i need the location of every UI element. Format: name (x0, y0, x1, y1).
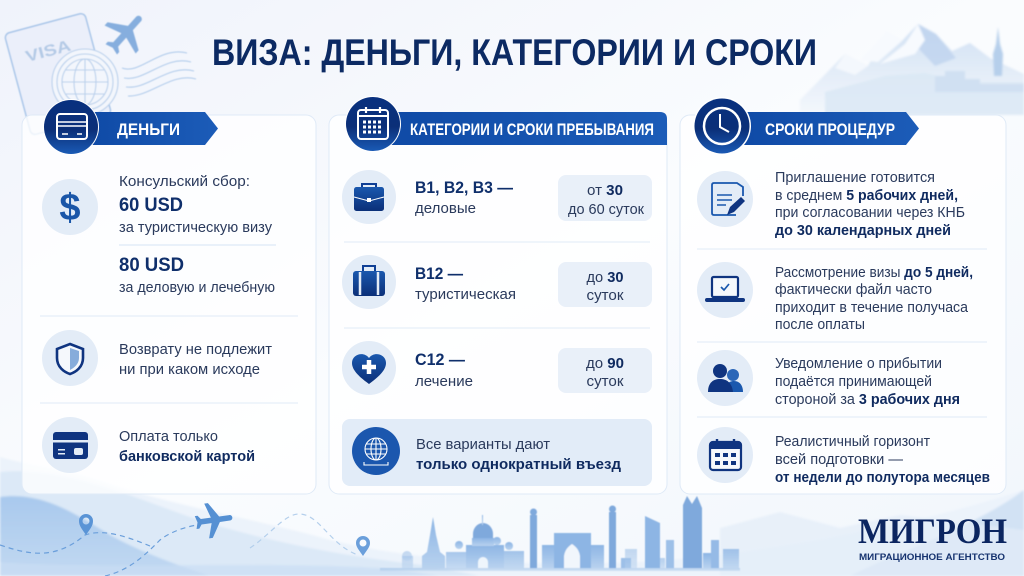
row: рассмотрение (697, 262, 973, 333)
row: рассмотрение: приходит в течение получаса (775, 299, 969, 316)
row: рассмотрение: Рассмотрение визы до 5 дней, (775, 264, 973, 281)
panel: деньги (22, 99, 316, 494)
text block: консульский сбор (119, 173, 276, 296)
title: ВИЗА: ДЕНЬГИ, КАТЕГОРИИ И СРОКИ (212, 32, 817, 73)
callout: однократный въезд: Все варианты дают (416, 436, 550, 453)
row: приглашение: Приглашение готовится (775, 169, 935, 186)
row: c12 (342, 341, 652, 395)
visa passport card: VISA (24, 37, 73, 66)
text block: консульский сбор: 60 USD (119, 195, 183, 216)
icon: top plane (96, 3, 156, 63)
text: оплата (119, 428, 255, 465)
row: c12: до 90 (586, 355, 624, 372)
heading: сроки: СРОКИ ПРОЦЕДУР (765, 120, 895, 139)
bottom waves (0, 457, 1024, 576)
mountains (800, 24, 1024, 115)
visa passport card (4, 13, 112, 135)
text: оплата: банковской картой (119, 448, 255, 465)
row: c12: суток (586, 373, 624, 390)
city skyline (380, 496, 740, 571)
text block: консульский сбор: 80 USD (119, 255, 184, 276)
heading: категории: КАТЕГОРИИ И СРОКИ ПРЕБЫВАНИЯ (410, 120, 654, 139)
row: b1 b2 b3: деловые (415, 200, 476, 217)
heading: деньги: ДЕНЬГИ (117, 120, 180, 139)
row: приглашение: при согласовании через КНБ (775, 204, 965, 221)
text block: консульский сбор: за туристическую визу (119, 219, 272, 236)
decoration: visa stamp (4, 3, 196, 135)
icon: pin 1 (79, 514, 93, 535)
logo: мигрон: МИГРОН (858, 511, 1007, 551)
row: горизонт: от недели до полутора месяцев (775, 469, 990, 486)
row: уведомление: подаётся принимающей (775, 373, 932, 390)
heading: деньги (43, 99, 218, 155)
row: горизонт: Реалистичный горизонт (775, 433, 930, 450)
icon: shield (42, 330, 98, 386)
row: горизонт: всей подготовки — (775, 451, 903, 468)
row: b1 b2 b3: B1, B2, B3 — (415, 178, 513, 197)
row: уведомление (697, 350, 960, 408)
tv tower (993, 27, 1003, 76)
row: уведомление: Уведомление о прибытии (775, 355, 942, 372)
globe stamp (52, 49, 118, 115)
row: c12: C12 — (415, 350, 465, 369)
row: b12 (342, 255, 652, 309)
heading: сроки (693, 97, 919, 155)
heading: категории (345, 96, 667, 152)
row: b12: суток (586, 287, 624, 304)
text block: консульский сбор: за деловую и лечебную (119, 279, 275, 296)
row: b12: туристическая (415, 286, 516, 303)
callout: однократный въезд (342, 419, 652, 486)
row: b1 b2 b3 (342, 170, 652, 224)
logo: мигрон: МИГРАЦИОННОЕ АГЕНТСТВО (859, 552, 1005, 562)
panel: сроки процедур (680, 97, 1006, 494)
icon: bank card (42, 417, 98, 473)
icon: dollar: $ (59, 187, 81, 229)
text: оплата: Оплата только (119, 428, 218, 445)
row: b1 b2 b3: от 30 (587, 182, 623, 199)
row: рассмотрение: фактически файл часто (775, 281, 932, 298)
row: b12: до 30 (586, 269, 624, 286)
row: b1 b2 b3: до 60 суток (568, 201, 644, 218)
row: c12: лечение (415, 373, 473, 390)
text: возврат: Возврату не подлежит (119, 341, 272, 358)
icon: pin 2 (356, 536, 370, 556)
postmark waves (122, 52, 196, 96)
text: возврат (119, 341, 272, 378)
icon: dollar (42, 179, 98, 235)
row: горизонт (697, 427, 990, 486)
row: b12: B12 — (415, 264, 463, 283)
text: возврат: ни при каком исходе (119, 361, 260, 378)
icon: plane (193, 500, 235, 540)
row: рассмотрение: после оплаты (775, 316, 865, 333)
row: приглашение: до 30 календарных дней (775, 222, 951, 239)
row: уведомление: стороной за 3 рабочих дня (775, 391, 960, 408)
panel: категории и сроки (329, 96, 667, 494)
row: приглашение: в среднем 5 рабочих дней, (775, 187, 958, 204)
route with plane and pins (0, 500, 370, 576)
row: приглашение (697, 169, 965, 239)
callout: однократный въезд: только однократный въезд (416, 456, 621, 473)
text block: консульский сбор: Консульский сбор: (119, 173, 250, 190)
